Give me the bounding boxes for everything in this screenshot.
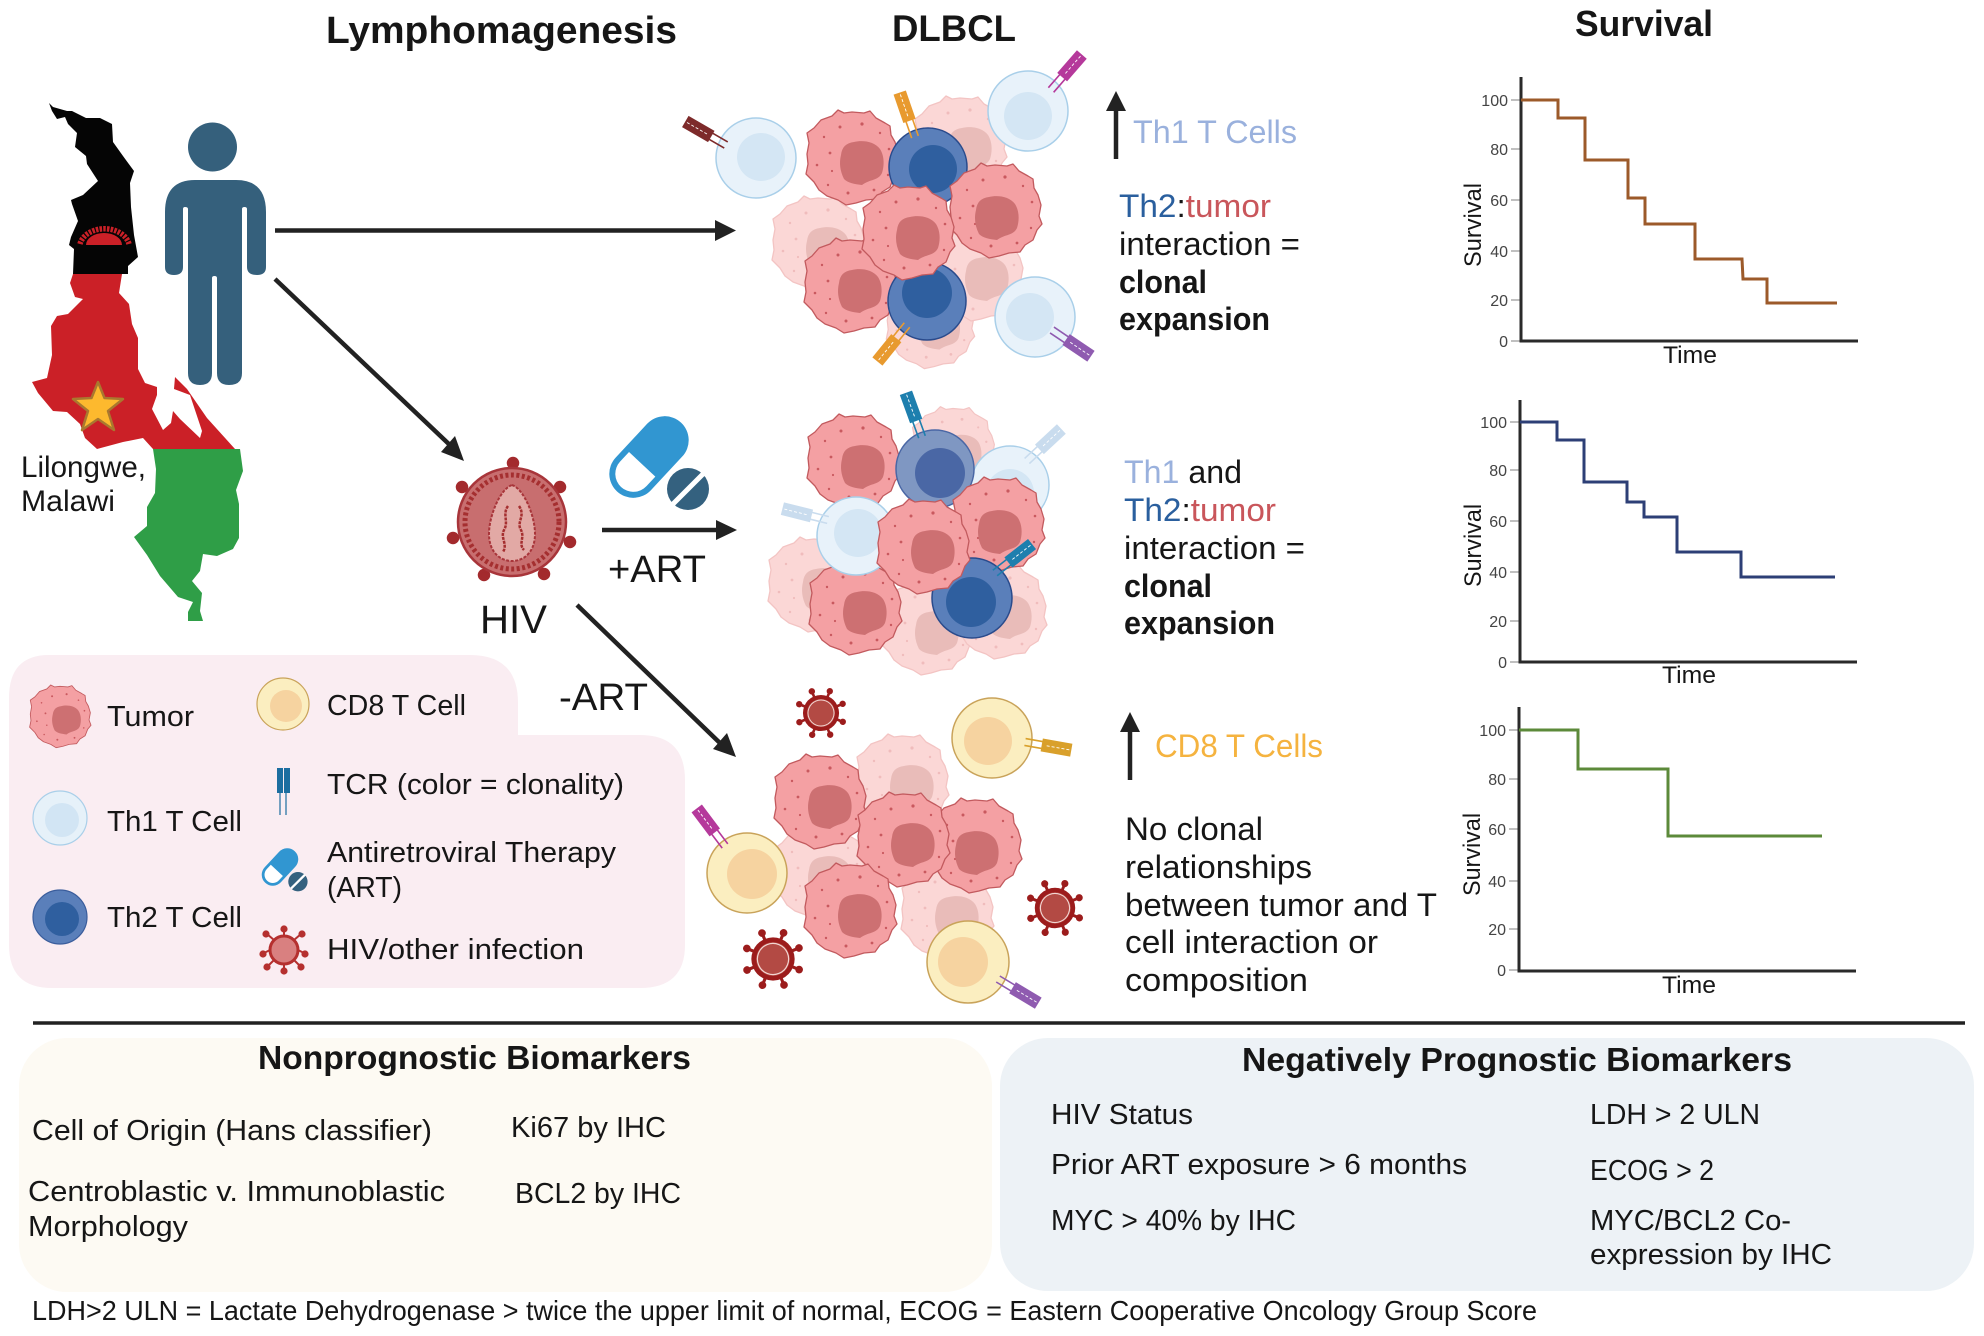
panel: negatively prognostic biomarkers [1000, 1038, 1974, 1291]
arrow: plus ART [602, 520, 737, 540]
text block: Th1 and Th2 tumor clonal expansion: Th2:tumor [1124, 492, 1276, 528]
text: +ART: +ART [608, 549, 706, 591]
legend item: Th1 T cell [33, 791, 242, 845]
text: Lilongwe, Malawi [21, 451, 146, 518]
text: negative biomarker list: HIV Status [1051, 1099, 1193, 1131]
chart: survival curve no HIV: 20 [1490, 293, 1508, 310]
text block: Th1 and Th2 tumor clonal expansion: interaction = [1124, 530, 1305, 566]
footnote: LDH>2 ULN = Lactate Dehydrogenase > twice the upper limit of normal, ECOG = Eastern Cooperative Oncology Group Score [32, 1295, 1537, 1326]
chart: survival curve HIV plus ART: Time [1662, 662, 1716, 689]
text: Lilongwe, Malawi: Malawi [21, 485, 115, 518]
arrow: CD8 up [1120, 712, 1140, 780]
chart: survival curve no HIV: 80 [1490, 142, 1508, 159]
chart: survival curve HIV no ART: Survival [1459, 813, 1486, 896]
chart: survival curve HIV plus ART: Survival [1460, 504, 1487, 587]
arrow: minus ART [577, 605, 736, 757]
text block: no clonal relationships: composition [1125, 962, 1308, 998]
chart: survival curve HIV plus ART: 20 [1489, 614, 1507, 631]
icon: HIV virus [448, 458, 574, 580]
text block: no clonal relationships: cell interaction or [1125, 924, 1378, 960]
legend item: ART: Antiretroviral Therapy [327, 837, 617, 869]
text: nonprognostic biomarker list: Centroblastic v. Immunoblastic [28, 1176, 445, 1208]
icon: Malawi flag map [32, 103, 243, 621]
chart: survival curve no HIV: 0 [1499, 334, 1508, 351]
chart: survival curve HIV no ART: 0 [1497, 963, 1506, 980]
chart: survival curve no HIV: 40 [1490, 244, 1508, 261]
icon: ART pill [599, 406, 709, 510]
text block: no clonal relationships: No clonal [1125, 811, 1263, 847]
text block: Th2 tumor clonal expansion: expansion [1119, 301, 1270, 337]
text: negative biomarker list: Prior ART exposure > 6 months [1051, 1149, 1467, 1181]
text block: no clonal relationships [1125, 811, 1437, 998]
arrow: Th1 up [1106, 91, 1126, 159]
arrow: person to DLBCL [275, 220, 736, 241]
text block: no clonal relationships: between tumor and T [1125, 887, 1437, 923]
legend item: Th2 T cell: Th2 T Cell [107, 902, 242, 934]
text: negative biomarker list [1051, 1099, 1832, 1271]
chart: survival curve HIV no ART: 100 [1479, 723, 1506, 740]
chart: survival curve HIV no ART [1459, 707, 1856, 999]
text: Th1 T Cells: Th1 T Cells [1133, 114, 1297, 150]
legend item: tumor [30, 685, 194, 748]
illustration: DLBCL HIV plus ART cell cluster [768, 391, 1066, 675]
chart: survival curve no HIV: 60 [1490, 193, 1508, 210]
chart: survival curve HIV no ART: 20 [1488, 922, 1506, 939]
text block: Th1 and Th2 tumor clonal expansion [1124, 454, 1305, 641]
chart: survival curve HIV plus ART: 80 [1489, 463, 1507, 480]
text: negative biomarker list: MYC > 40% by IHC [1051, 1205, 1296, 1237]
legend item: HIV/other infection [260, 926, 584, 974]
icon: person [165, 122, 266, 385]
text: HIV: HIV [480, 598, 547, 642]
legend item: Th1 T cell: Th1 T Cell [107, 806, 242, 838]
chart: survival curve HIV plus ART: 100 [1480, 415, 1507, 432]
text block: Th1 and Th2 tumor clonal expansion: expansion [1124, 605, 1275, 641]
text: negative biomarker list: LDH > 2 ULN [1590, 1099, 1760, 1131]
text block: Th2 tumor clonal expansion: clonal [1119, 264, 1207, 300]
text: nonprognostic biomarker list: Morphology [28, 1211, 189, 1243]
legend item: TCR [277, 768, 624, 815]
text: negative biomarker list: ECOG > 2 [1590, 1155, 1714, 1187]
text: CD8 T Cells: CD8 T Cells [1155, 728, 1323, 764]
text: negative biomarker list: MYC/BCL2 Co- [1590, 1205, 1791, 1237]
text: nonprognostic biomarker list: Ki67 by IHC [511, 1112, 666, 1144]
chart: survival curve HIV plus ART: 60 [1489, 514, 1507, 531]
chart: survival curve HIV plus ART [1460, 400, 1857, 689]
divider line [33, 1021, 1965, 1025]
chart: survival curve HIV plus ART: 0 [1498, 655, 1507, 672]
chart: survival curve HIV no ART: 60 [1488, 822, 1506, 839]
text block: Th1 and Th2 tumor clonal expansion: Th1 and [1124, 454, 1242, 490]
chart: survival curve no HIV: Time [1663, 342, 1717, 369]
chart: survival curve no HIV: Survival [1460, 183, 1487, 267]
chart: survival curve HIV plus ART: 40 [1489, 565, 1507, 582]
legend item: TCR: TCR (color = clonality) [327, 769, 624, 801]
text: nonprognostic biomarker list: Cell of Origin (Hans classifier) [32, 1115, 432, 1147]
text block: Th1 and Th2 tumor clonal expansion: clonal [1124, 568, 1212, 604]
chart: survival curve HIV no ART: Time [1662, 972, 1716, 999]
arrow: person to HIV [275, 279, 464, 461]
legend item: Th2 T cell [33, 890, 242, 944]
heading: Nonprognostic Biomarkers: Nonprognostic Biomarkers [258, 1039, 691, 1076]
title: Survival: Survival [1575, 3, 1713, 44]
legend item: HIV/other infection: HIV/other infection [327, 934, 584, 966]
text block: Th2 tumor clonal expansion: interaction = [1119, 226, 1300, 262]
legend item: tumor: Tumor [107, 701, 194, 733]
chart: survival curve HIV no ART: 40 [1488, 874, 1506, 891]
illustration: DLBCL no HIV cell cluster [682, 50, 1095, 369]
title: Lymphomagenesis: Lymphomagenesis [326, 10, 677, 52]
text: -ART: -ART [559, 677, 648, 719]
chart: survival curve no HIV [1460, 77, 1858, 369]
panel: nonprognostic biomarkers [19, 1038, 992, 1292]
chart: survival curve no HIV: 100 [1481, 93, 1508, 110]
text: negative biomarker list: expression by IHC [1590, 1239, 1832, 1271]
illustration: DLBCL HIV no ART cell cluster [692, 678, 1094, 1009]
legend item: CD8 T cell [257, 678, 466, 730]
heading: Negatively Prognostic Biomarkers: Negatively Prognostic Biomarkers [1242, 1041, 1792, 1078]
legend item: ART: (ART) [327, 872, 402, 904]
legend item: CD8 T cell: CD8 T Cell [327, 690, 466, 722]
legend item: ART [257, 837, 617, 904]
text: Lilongwe, Malawi: Lilongwe, [21, 451, 146, 484]
text: nonprognostic biomarker list: BCL2 by IHC [515, 1178, 681, 1210]
text: nonprognostic biomarker list [28, 1112, 681, 1243]
chart: survival curve HIV no ART: 80 [1488, 772, 1506, 789]
text block: no clonal relationships: relationships [1125, 849, 1312, 885]
text block: Th2 tumor clonal expansion [1119, 188, 1300, 337]
panel: legend [9, 655, 685, 988]
title: DLBCL: DLBCL [892, 8, 1016, 49]
text block: Th2 tumor clonal expansion: Th2:tumor [1119, 188, 1271, 224]
